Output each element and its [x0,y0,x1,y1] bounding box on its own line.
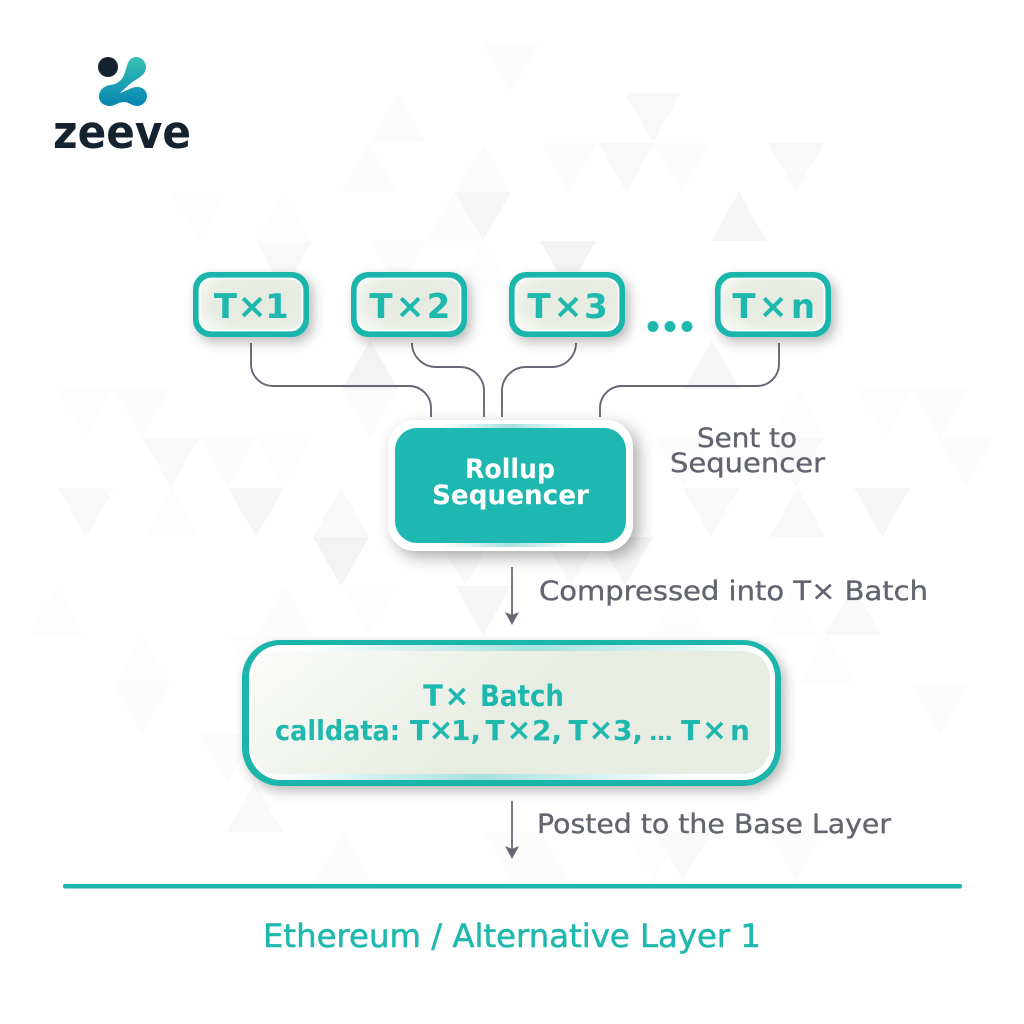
logo: zeeve [53,57,191,159]
box: Tx Batch: n [730,714,750,747]
base layer line [63,884,962,888]
box: Tx 2: T [369,287,393,327]
box: Tx n: T [732,287,756,327]
box: Tx Batch: T [410,714,429,747]
arrow: sequencer to batch [505,567,519,625]
label: Sent to Sequencer [670,423,825,479]
label: Sent to Sequencer: Sequencer [670,448,825,479]
box: Tx 3: 3 [584,287,608,327]
label: Posted to the Base Layer: Posted to the Base Layer [537,809,891,840]
box: Tx Batch: T [568,714,588,747]
box: Tx Batch: T [423,679,443,713]
box: Tx n [715,272,831,337]
label: Compressed into Tx Batch: Compressed into T× Batch [539,576,928,607]
arrow: batch to base layer [505,801,519,859]
box: Tx 2: 2 [427,287,450,327]
box: Tx Batch: × [506,713,532,748]
box: Tx Batch: T [485,714,505,747]
box: Tx 1: 1 [265,287,289,327]
box: Tx 3: × [553,287,583,327]
logo icon [98,57,147,106]
box: Tx Batch: × [588,713,614,748]
box: Tx 3: T [527,287,551,327]
box: Tx Batch: × [702,713,727,748]
box: Tx 1: × [237,287,267,327]
box: Tx Batch: calldata: [275,714,400,747]
box: Tx Batch: 3, [613,714,643,747]
logo wordmark: zeeve [53,106,191,159]
box: Rollup Sequencer: Sequencer [432,480,589,511]
box: Tx Batch: × [428,713,454,748]
box: Tx 2: × [395,287,425,327]
label: Ethereum / Alternative Layer 1: Ethereum / Alternative Layer 1 [263,917,761,955]
box: Tx 2 [351,272,467,337]
box: Tx Batch: Batch [480,679,564,713]
box: Tx Batch: T [681,714,700,747]
box: Rollup Sequencer: Rollup [465,454,555,485]
ellipsis dots [648,321,692,332]
box: Tx Batch: ... [649,715,673,746]
connector lines [251,343,779,417]
box: Tx Batch: 1, [451,714,481,747]
box: Tx Batch: 2, [532,714,562,747]
box: Tx Batch [242,640,781,786]
box: Tx Batch: × [444,679,470,714]
box: Tx n: × [758,287,788,327]
box: Tx n: n [791,287,815,327]
box: Tx 1: T [214,287,238,327]
box: Tx 3 [509,272,625,337]
box: Rollup Sequencer [388,420,633,551]
box: Tx 1 [193,272,309,337]
label: Sent to Sequencer: Sent to [697,423,797,454]
